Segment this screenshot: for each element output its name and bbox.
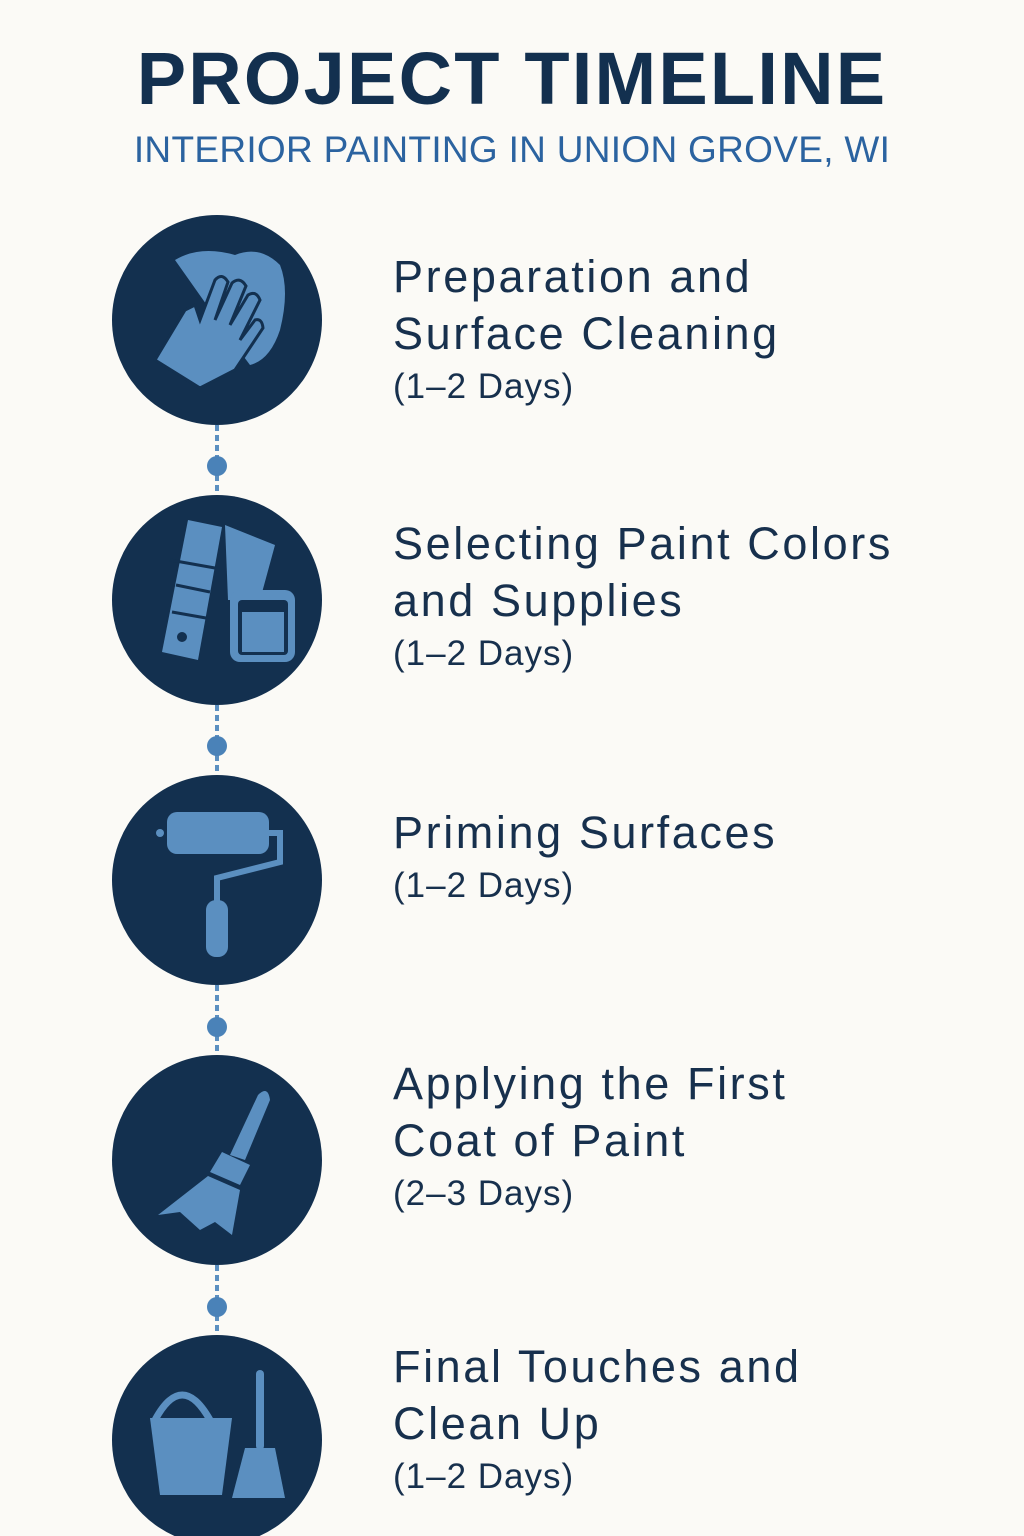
step 5 text: (1–2 Days) xyxy=(393,1457,574,1496)
step 4 text: (2–3 Days) xyxy=(393,1174,574,1213)
icon: swatches and can xyxy=(112,495,322,705)
connectors xyxy=(215,425,219,1335)
icon: hand cleaning xyxy=(112,215,322,425)
step 5 text: Clean Up xyxy=(393,1398,601,1449)
icon: paintbrush xyxy=(112,1055,322,1265)
step 3 text: (1–2 Days) xyxy=(393,866,574,905)
subtitle: INTERIOR PAINTING IN UNION GROVE, WI xyxy=(134,129,890,170)
title: PROJECT TIMELINE xyxy=(137,37,887,120)
step 2 text: and Supplies xyxy=(393,575,684,626)
step 1 text: Preparation and xyxy=(393,251,752,302)
icon: paint roller xyxy=(112,775,322,985)
step 1 text: Surface Cleaning xyxy=(393,308,780,359)
step 4 text: Coat of Paint xyxy=(393,1115,687,1166)
step 1 text xyxy=(393,251,780,406)
connector dots xyxy=(207,456,227,1317)
step 1 text: (1–2 Days) xyxy=(393,367,574,406)
step 4 text: Applying the First xyxy=(393,1058,787,1109)
step 3 text: Priming Surfaces xyxy=(393,807,777,858)
step 4 text xyxy=(393,1058,787,1213)
step 5 text xyxy=(393,1341,802,1496)
step 5 text: Final Touches and xyxy=(393,1341,802,1392)
step 2 text: Selecting Paint Colors xyxy=(393,518,893,569)
step 2 text xyxy=(393,518,893,673)
step 2 text: (1–2 Days) xyxy=(393,634,574,673)
step 3 text xyxy=(393,807,777,905)
icon: bucket and broom xyxy=(112,1335,322,1536)
